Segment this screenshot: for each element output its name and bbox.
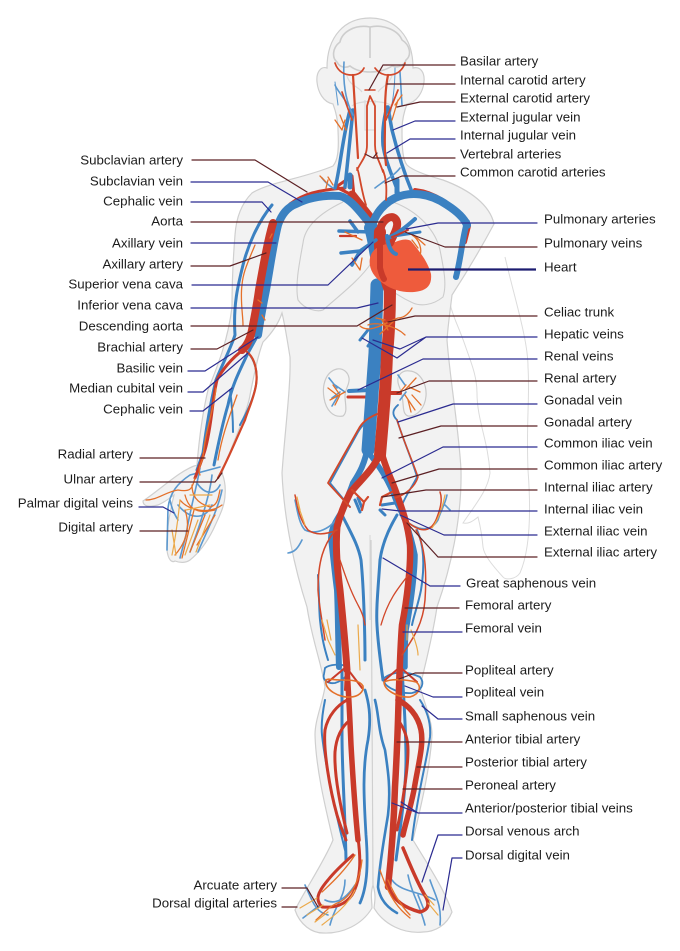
label: Brachial artery: Brachial artery (97, 340, 183, 354)
label: Common iliac artery (392, 458, 663, 483)
label: Great saphenous vein: Great saphenous vein (466, 576, 596, 590)
label: Arcuate artery: Arcuate artery (193, 878, 277, 892)
label: Renal veins: Renal veins (544, 348, 614, 364)
label: Dorsal digital vein: Dorsal digital vein (465, 848, 570, 862)
knee and groin crease (369, 535, 371, 620)
label: Subclavian vein (90, 174, 302, 202)
lungs (297, 202, 445, 311)
cerebellum and spine (347, 76, 392, 130)
small branches (146, 95, 445, 925)
label: Axillary artery (102, 253, 266, 272)
label: Arcuate artery (193, 878, 318, 907)
label: Pulmonary veins: Pulmonary veins (544, 236, 643, 250)
label: Common carotid arteries: Common carotid arteries (460, 164, 606, 180)
body silhouette (143, 18, 529, 933)
label: Common carotid arteries (385, 164, 606, 183)
label: Palmar digital veins: Palmar digital veins (18, 496, 133, 510)
label: Median cubital vein (69, 353, 248, 396)
label: External iliac vein (400, 515, 647, 538)
label: Cephalic vein: Cephalic vein (103, 194, 183, 208)
label: Subclavian artery (80, 152, 307, 192)
label: Gonadal artery (399, 414, 632, 438)
label: Hepatic veins: Hepatic veins (544, 326, 624, 342)
label: Basilic vein: Basilic vein (116, 360, 183, 376)
label: Internal iliac vein: Internal iliac vein (544, 502, 643, 516)
aortic arch (380, 217, 397, 279)
label: Anterior/posterior tibial veins (392, 800, 633, 816)
label: Posterior tibial artery: Posterior tibial artery (465, 754, 587, 770)
label: Inferior vena cava: Inferior vena cava (77, 298, 184, 312)
label: Inferior vena cava (77, 298, 378, 312)
label: Brachial artery (97, 330, 253, 354)
label: Common iliac vein: Common iliac vein (544, 436, 653, 450)
label: External iliac vein: External iliac vein (544, 524, 647, 538)
label: Renal veins (358, 348, 614, 390)
label: Hepatic veins (362, 326, 624, 358)
label: Cephalic vein, forearm: Cephalic vein (103, 402, 183, 416)
label: Descending aorta: Descending aorta (79, 318, 184, 334)
label: Celiac trunk (388, 304, 615, 322)
label: Renal artery (397, 370, 617, 393)
brain (334, 26, 409, 72)
label: Pulmonary veins (405, 232, 643, 250)
kidneys (323, 369, 426, 416)
label: External jugular vein (393, 110, 580, 130)
arteries behind the veins (290, 176, 469, 397)
label: Axillary artery: Axillary artery (102, 256, 183, 272)
label: Vertebral arteries (365, 146, 562, 162)
label: Axillary vein: Axillary vein (112, 236, 183, 250)
label: External iliac artery: External iliac artery (544, 544, 657, 560)
label: Popliteal vein: Popliteal vein (465, 684, 544, 700)
label: Median cubital vein: Median cubital vein (69, 380, 183, 396)
label: Internal jugular vein (387, 128, 576, 153)
label: Digital artery: Digital artery (58, 520, 133, 534)
label: Anterior tibial artery: Anterior tibial artery (465, 732, 581, 746)
label: Internal iliac artery: Internal iliac artery (544, 480, 653, 494)
label: Dorsal digital arteries: Dorsal digital arteries (152, 896, 277, 910)
label: External carotid artery (397, 90, 590, 107)
label: External iliac artery (407, 523, 657, 560)
label: Popliteal vein (405, 684, 544, 700)
label: Internal iliac artery (382, 480, 653, 497)
label: Peroneal artery: Peroneal artery (465, 778, 556, 792)
label: Dorsal venous arch (422, 824, 580, 882)
label: Basilar artery: Basilar artery (460, 54, 539, 68)
label: Cephalic vein (103, 194, 271, 212)
label: External carotid artery: External carotid artery (460, 90, 590, 106)
label: Ulnar artery (64, 472, 222, 486)
label: Femoral vein: Femoral vein (465, 620, 542, 636)
label: Basilic vein (116, 337, 258, 376)
label: External jugular vein: External jugular vein (460, 110, 580, 124)
label: Celiac trunk: Celiac trunk (544, 304, 615, 320)
label: Common iliac vein (382, 436, 653, 478)
label lines and text, left column (18, 152, 392, 910)
label: Subclavian artery: Subclavian artery (80, 152, 183, 168)
heart (370, 240, 431, 292)
label: Internal carotid artery: Internal carotid artery (460, 72, 586, 88)
label: Aorta: Aorta (151, 214, 184, 228)
label: Digital artery (58, 520, 188, 534)
label: Renal artery: Renal artery (544, 370, 617, 386)
label: Femoral artery: Femoral artery (465, 598, 552, 612)
veins (167, 62, 467, 925)
label: Small saphenous vein: Small saphenous vein (465, 708, 595, 724)
label: Great saphenous vein (383, 558, 596, 590)
label: Pulmonary arteries (406, 212, 656, 229)
label: Ulnar artery: Ulnar artery (64, 472, 133, 486)
arteries (195, 63, 441, 912)
label: Gonadal vein: Gonadal vein (544, 392, 622, 408)
label: Descending aorta (79, 305, 392, 334)
label: Superior vena cava: Superior vena cava (68, 276, 184, 292)
label: Radial artery: Radial artery (58, 446, 133, 462)
label: Gonadal vein (398, 392, 622, 422)
label: Anterior/posterior tibial veins: Anterior/posterior tibial veins (465, 800, 633, 816)
pulmonary vessels (339, 219, 420, 265)
label: Cephalic vein, forearm (103, 388, 232, 416)
label: Common iliac artery: Common iliac artery (544, 458, 663, 472)
label: Dorsal digital vein (443, 848, 570, 910)
label: Palmar digital veins (18, 496, 174, 513)
label: Internal jugular vein: Internal jugular vein (460, 128, 576, 142)
label: Heart: Heart (544, 260, 577, 274)
label: Superior vena cava (68, 242, 373, 292)
label: Femoral vein (403, 620, 542, 636)
label: Vertebral arteries: Vertebral arteries (460, 146, 562, 162)
label: Dorsal venous arch: Dorsal venous arch (465, 824, 580, 838)
label: Small saphenous vein (422, 706, 595, 724)
label lines and text, right column (358, 54, 663, 910)
label: Popliteal artery: Popliteal artery (465, 662, 554, 678)
label: Popliteal artery (399, 662, 554, 679)
label: Subclavian vein: Subclavian vein (90, 174, 183, 188)
label: Basilar artery (369, 54, 539, 90)
label: Gonadal artery: Gonadal artery (544, 414, 632, 430)
label: Pulmonary arteries: Pulmonary arteries (544, 212, 656, 226)
